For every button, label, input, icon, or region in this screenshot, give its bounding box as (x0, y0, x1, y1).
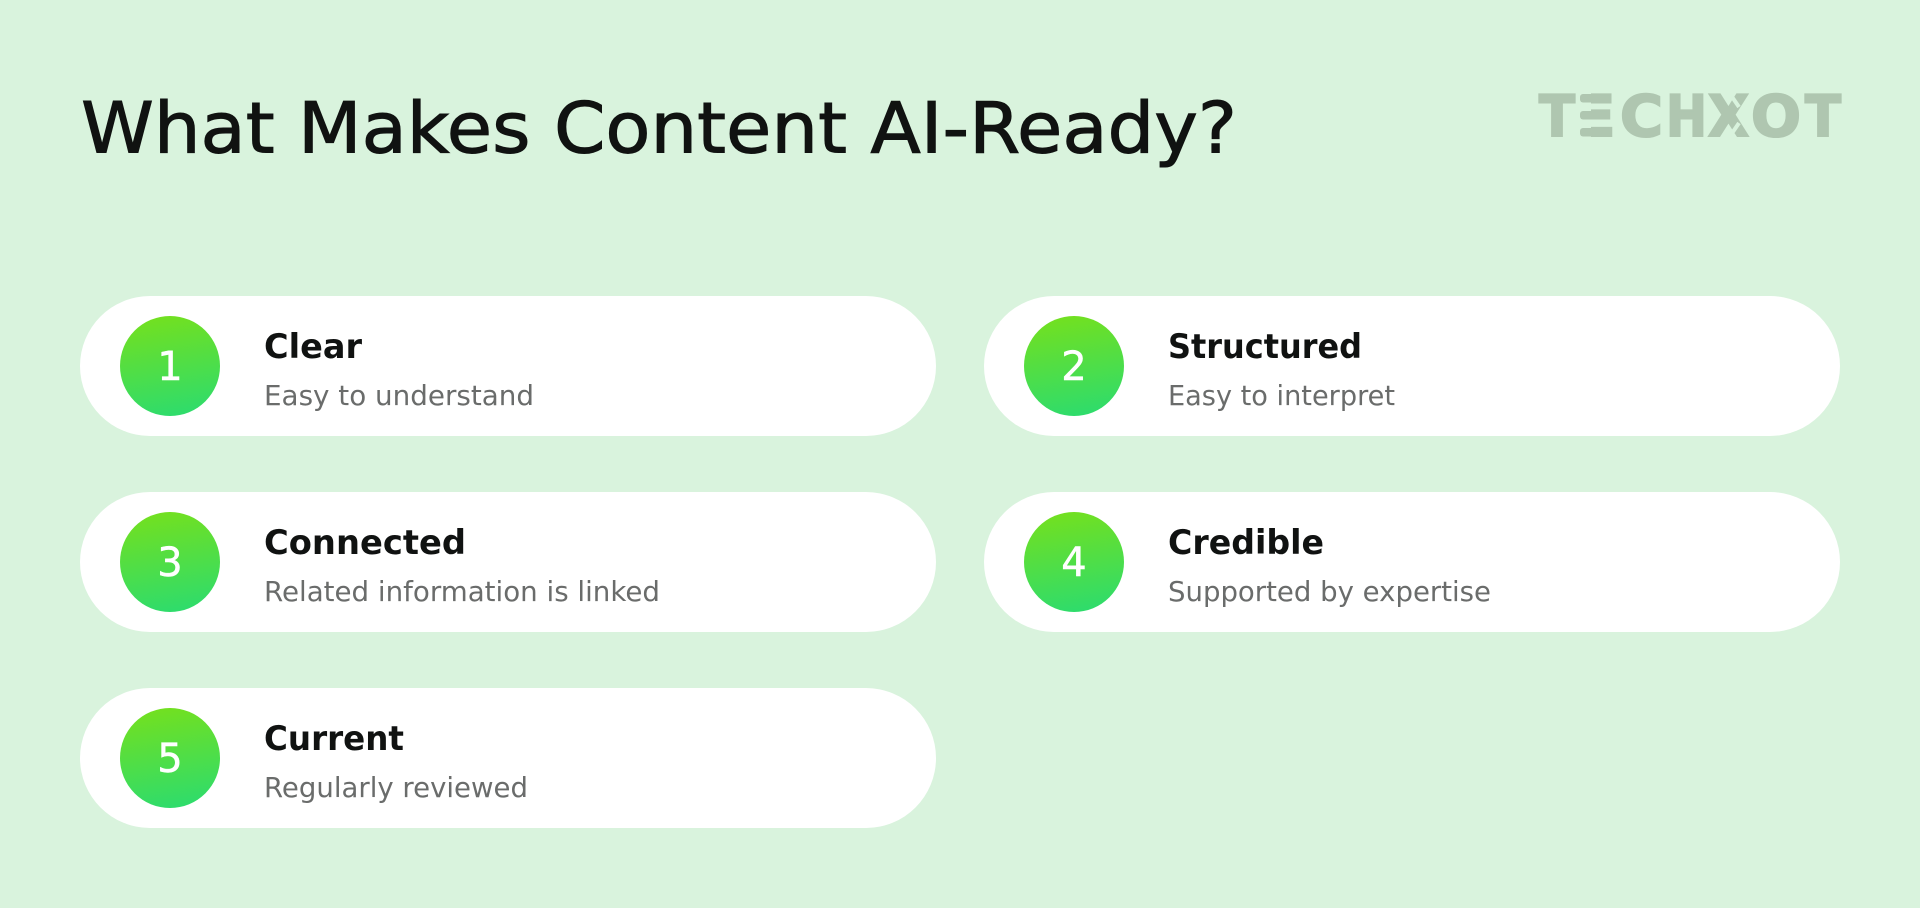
panel: card 5 Current (80, 688, 936, 828)
logo: Techxot wordmark: X (1708, 84, 1749, 150)
icon: number 4 badge: 4 (1061, 540, 1087, 586)
text: Easy to understand: Easy to understand (264, 380, 534, 412)
logo: Techxot wordmark: T (1805, 84, 1841, 150)
panel: card 3 Connected (80, 492, 936, 632)
icon: number 2 badge: 2 (1061, 344, 1087, 390)
icon: number 4 badge (1024, 512, 1124, 612)
heading: Connected: Connected (264, 523, 466, 562)
title: What Makes Content AI-Ready? (81, 88, 1237, 170)
logo: Techxot wordmark: C (1620, 84, 1663, 150)
logo: Techxot wordmark: O (1751, 84, 1801, 150)
text: Regularly reviewed: Regularly reviewed (264, 772, 528, 804)
icon: number 5 badge (120, 708, 220, 808)
icon: number 3 badge (120, 512, 220, 612)
logo: Techxot wordmark: T (1539, 84, 1575, 150)
icon: number 1 badge: 1 (157, 344, 183, 390)
logo: Techxot wordmark: E (1570, 84, 1616, 150)
text: Easy to interpret: Easy to interpret (1168, 380, 1395, 412)
heading: Current: Current (264, 719, 404, 758)
logo: Techxot wordmark (1539, 84, 1841, 150)
panel: card 4 Credible (984, 492, 1840, 632)
text: Related information is linked: Related information is linked (264, 576, 660, 608)
icon: number 1 badge (120, 316, 220, 416)
logo: Techxot wordmark: H (1666, 84, 1707, 150)
icon: number 3 badge: 3 (157, 540, 183, 586)
panel: card 1 Clear (80, 296, 936, 436)
heading: Structured: Structured (1168, 327, 1362, 366)
icon: number 2 badge (1024, 316, 1124, 416)
heading: Clear: Clear (264, 327, 362, 366)
heading: Credible: Credible (1168, 523, 1324, 562)
panel: card 2 Structured (984, 296, 1840, 436)
icon: number 5 badge: 5 (157, 736, 183, 782)
text: Supported by expertise: Supported by expertise (1168, 576, 1491, 608)
